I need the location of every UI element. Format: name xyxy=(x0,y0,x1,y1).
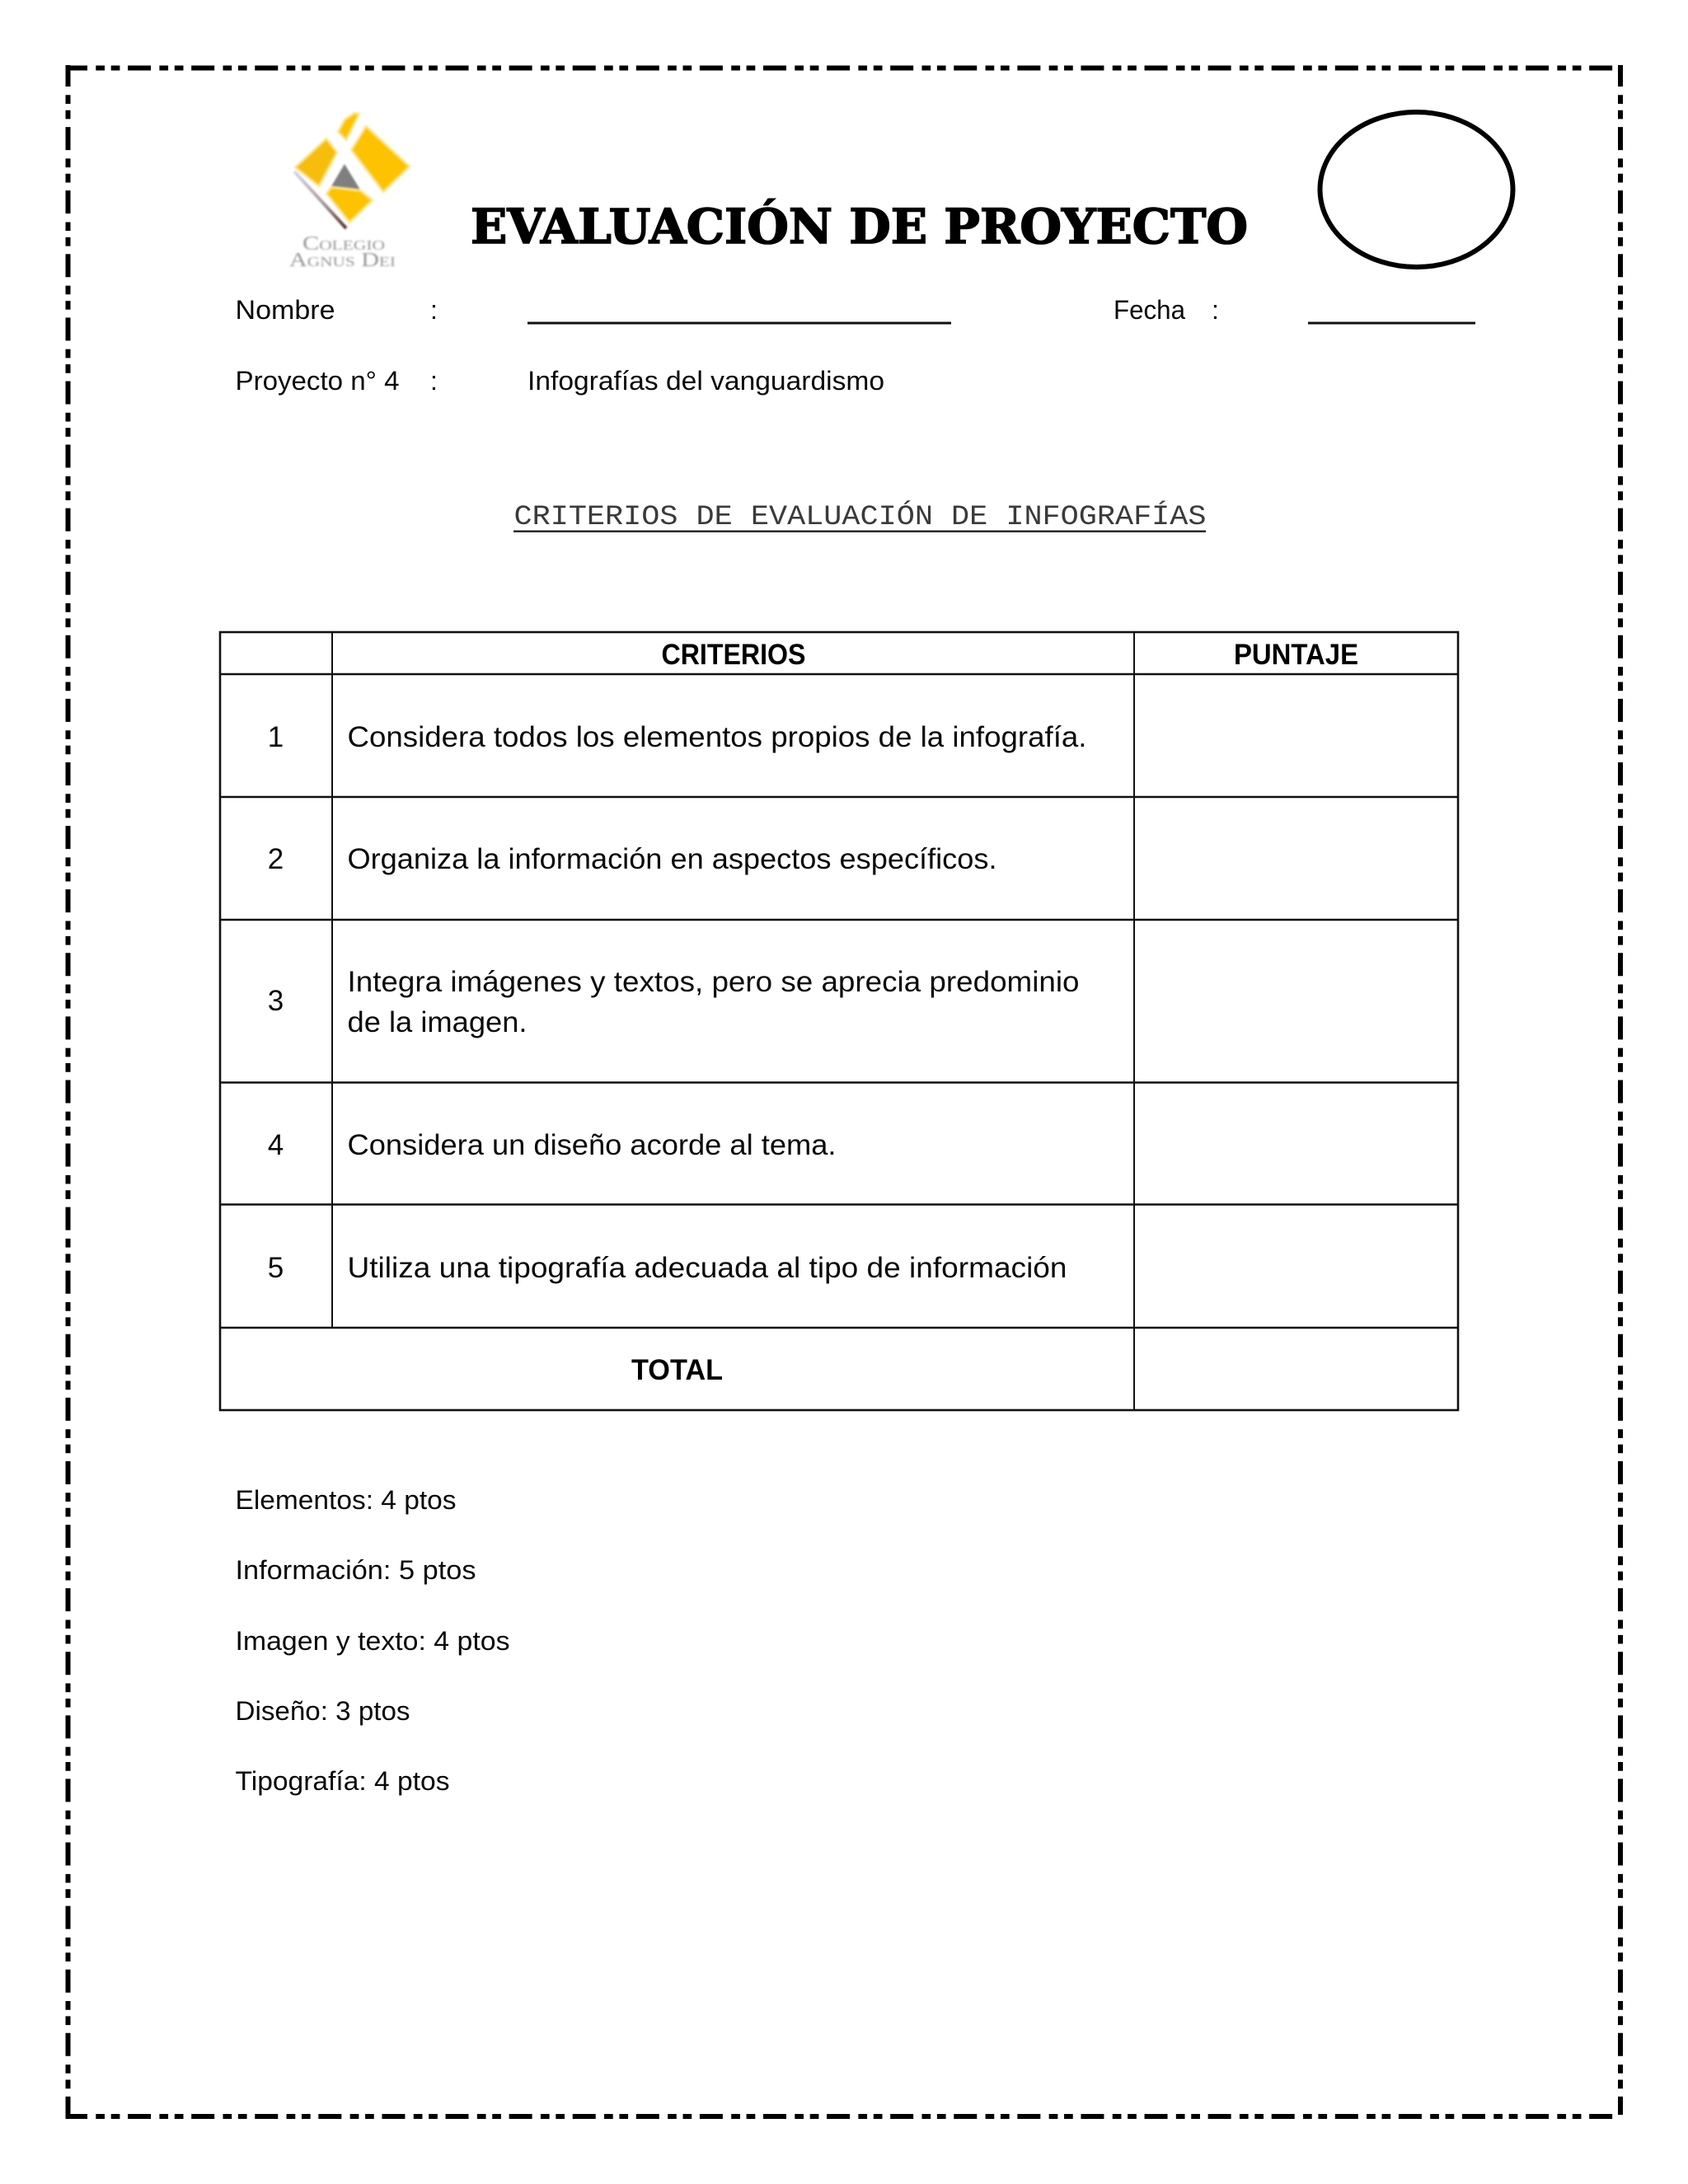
form field: proyecto: Proyecto n° 4 xyxy=(236,366,399,396)
total row label: TOTAL xyxy=(631,1354,723,1386)
points breakdown list: Imagen y texto: 4 ptos xyxy=(236,1626,509,1656)
form field: fecha xyxy=(1114,295,1475,325)
row 3: de la imagen. xyxy=(348,1006,528,1038)
row 3: Integra imágenes y textos, pero se aprecia predominio xyxy=(348,966,1080,998)
points breakdown list xyxy=(236,1485,509,1796)
row 2: Organiza la información en aspectos específicos. xyxy=(348,843,997,875)
subtitle: CRITERIOS DE EVALUACIÓN DE INFOGRAFÍAS xyxy=(514,501,1207,533)
row 4: Considera un diseño acorde al tema. xyxy=(348,1129,836,1161)
row 4: 4 xyxy=(268,1129,284,1161)
logo emblem xyxy=(294,113,410,228)
logo wordmark xyxy=(289,233,396,271)
row 3: 3 xyxy=(268,985,284,1017)
points breakdown list: Información: 5 ptos xyxy=(236,1555,476,1585)
form field: nombre xyxy=(236,295,951,325)
header: puntaje: PUNTAJE xyxy=(1234,639,1358,671)
row 1: 1 xyxy=(268,721,284,753)
table grid xyxy=(220,632,1458,1410)
row 5: 5 xyxy=(268,1252,284,1284)
row 2: 2 xyxy=(268,843,284,875)
criteria table xyxy=(220,632,1458,1410)
points breakdown list: Diseño: 3 ptos xyxy=(236,1696,410,1726)
header: criterios: CRITERIOS xyxy=(661,639,806,671)
row 3 xyxy=(268,966,1080,1038)
form field: fecha: Fecha xyxy=(1114,295,1185,325)
points breakdown list: Tipografía: 4 ptos xyxy=(236,1766,450,1796)
form field: nombre: : xyxy=(430,295,438,325)
row 5: Utiliza una tipografía adecuada al tipo de información xyxy=(348,1252,1067,1284)
logo wordmark: Agnus Dei xyxy=(289,250,396,271)
form field: proyecto: Infografías del vanguardismo xyxy=(528,366,884,396)
grade oval xyxy=(1320,112,1513,267)
row 1: Considera todos los elementos propios de la infografía. xyxy=(348,721,1086,753)
form field: fecha: : xyxy=(1212,295,1219,325)
form field: nombre: Nombre xyxy=(236,295,335,325)
form field: proyecto: : xyxy=(430,366,438,396)
logo: Colegio Agnus Dei xyxy=(289,113,410,271)
points breakdown list: Elementos: 4 ptos xyxy=(236,1485,457,1515)
title: EVALUACIÓN DE PROYECTO xyxy=(471,199,1248,255)
form field: proyecto xyxy=(236,366,884,396)
logo wordmark: Colegio xyxy=(302,233,385,255)
